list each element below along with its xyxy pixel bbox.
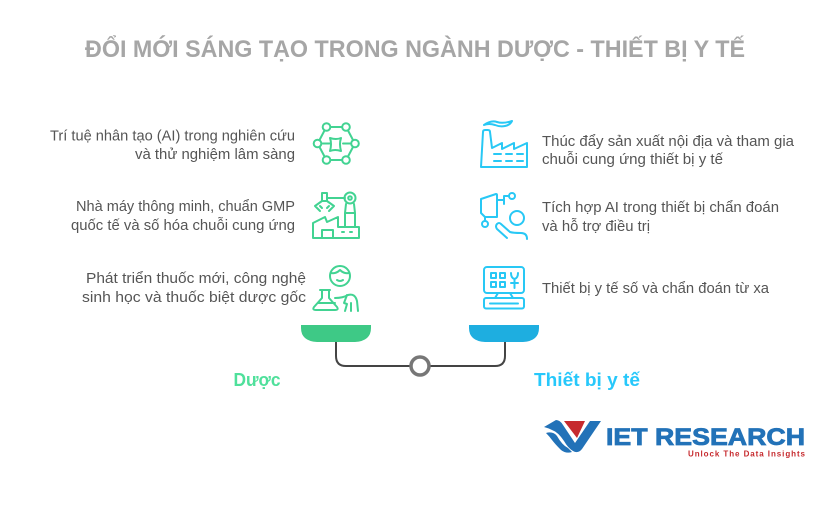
platform: Thiết bị y tế xyxy=(469,325,539,342)
logo: Viet Research: IET RESEARCH xyxy=(606,424,805,451)
text: AI in diagnostic devices xyxy=(542,199,779,235)
icon: smart factory robot arm xyxy=(313,192,359,238)
text: smart factory xyxy=(71,198,295,234)
node circle xyxy=(411,357,429,375)
text: AI in diagnostic devices: và hỗ trợ điều trị xyxy=(542,218,650,235)
text: AI in diagnostic devices: Tích hợp AI trong thiết bị chẩn đoán xyxy=(542,199,779,216)
text: new drugs xyxy=(82,270,307,306)
icon: computer terminal xyxy=(484,267,524,308)
text: new drugs: Phát triển thuốc mới, công nghệ xyxy=(86,270,306,287)
text: AI in research xyxy=(50,128,295,163)
icon: molecule network xyxy=(314,123,359,164)
text: smart factory: Nhà máy thông minh, chuẩn GMP xyxy=(76,198,295,215)
text: digital devices: Thiết bị y tế số và chẩn đoán từ xa xyxy=(542,280,770,297)
text: domestic manufacturing: chuỗi cung ứng thiết bị y tế xyxy=(542,151,724,168)
icon: scientist with flask xyxy=(313,266,358,311)
icon: AI diagnostic with person xyxy=(481,193,527,239)
text: AI in research: Trí tuệ nhân tạo (AI) trong nghiên cứu xyxy=(50,128,295,144)
connector xyxy=(336,342,505,366)
title: ĐỔI MỚI SÁNG TẠO TRONG NGÀNH DƯỢC - THIẾT BỊ Y TẾ xyxy=(85,35,745,63)
text: AI in research: và thử nghiệm lâm sàng xyxy=(135,146,295,163)
text: domestic manufacturing: Thúc đẩy sản xuất nội địa và tham gia xyxy=(542,133,795,150)
platform: Dược xyxy=(301,325,371,342)
logo: Viet Research: Unlock The Data Insights xyxy=(688,450,806,458)
label: Thiết bị y tế: Thiết bị y tế xyxy=(534,370,641,390)
text: smart factory: quốc tế và số hóa chuỗi cung ứng xyxy=(71,217,295,234)
label: Dược: Dược xyxy=(234,370,280,390)
logo: Viet Research xyxy=(544,420,806,458)
text: new drugs: sinh học và thuốc biệt dược gốc xyxy=(82,289,307,306)
icon: factory with smoke xyxy=(481,121,527,167)
text: domestic manufacturing xyxy=(542,133,795,168)
